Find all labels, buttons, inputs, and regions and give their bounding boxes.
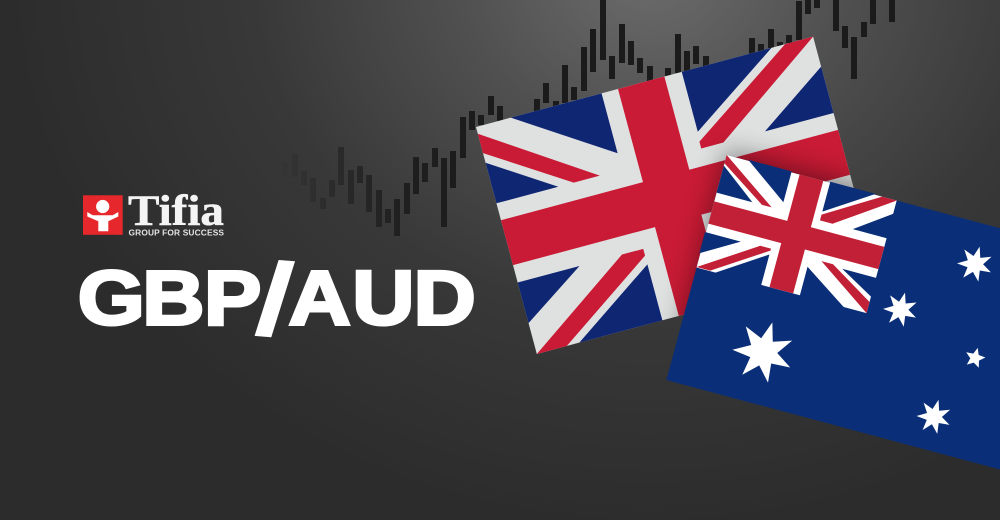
star: Alpha Crucis [913, 395, 955, 436]
UK flag blue fields [476, 37, 874, 354]
star: Beta Crucis [880, 288, 922, 329]
title: AUD [289, 256, 476, 341]
title: GBP [78, 256, 261, 341]
UK flag [476, 36, 854, 354]
candlestick chart [273, 0, 895, 236]
Australian flag [665, 154, 1000, 502]
logo wordmark: Tifia [128, 188, 224, 235]
star: Gamma Crucis [954, 242, 997, 284]
UK flag red cross and stripes [476, 37, 874, 354]
large Commonwealth star [726, 314, 801, 388]
shadow cast on UK flag [666, 138, 854, 318]
AU flag canton: Union Jack [695, 154, 898, 314]
logo icon [83, 195, 123, 235]
title: / [254, 243, 296, 357]
star: Epsilon Crucis [963, 345, 987, 369]
logo: Tifia [83, 188, 224, 237]
logo tagline: GROUP FOR SUCCESS [128, 227, 224, 237]
